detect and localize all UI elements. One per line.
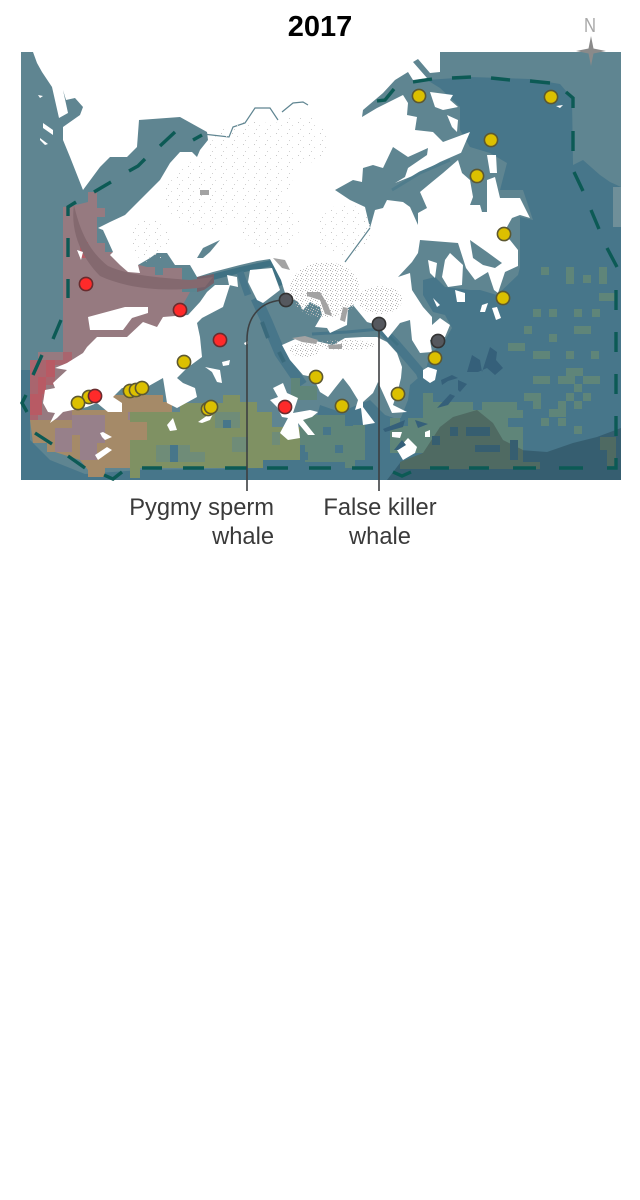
yellow sighting dots [71, 89, 558, 416]
seabed channel on the west [73, 205, 213, 289]
Tolo Harbour [335, 147, 472, 228]
Tolo inner channel [392, 160, 450, 190]
Kowloon and Island urban speckle [290, 262, 402, 357]
mainland [33, 52, 530, 353]
label: False killer whale: whale [348, 524, 411, 550]
grid gaps [432, 427, 518, 460]
light column at east edge [613, 187, 621, 227]
teal cells at pink edge [182, 268, 190, 292]
leader line: False killer whale [378, 324, 380, 491]
density grid: red cells [30, 352, 72, 420]
outlying islands [38, 92, 563, 460]
grey sighting dots [279, 293, 445, 348]
grey built-up patches [200, 190, 348, 349]
grid gaps west [170, 418, 408, 462]
sea base [21, 52, 621, 480]
dark rose water by Ma Wan [197, 274, 214, 292]
density grid: olive zone [130, 395, 300, 478]
title: 2017 [288, 11, 352, 43]
Sai Kung inlet [470, 240, 502, 268]
northern-territories urban speckle [130, 115, 375, 262]
map of Hong Kong waters [21, 52, 621, 480]
shipping channels [205, 263, 428, 392]
leader line: Pygmy sperm whale [247, 300, 286, 491]
density grid: orange zone [30, 395, 172, 477]
river [203, 102, 370, 262]
density grid: pink core [38, 192, 190, 425]
airport island [88, 307, 148, 330]
label: False killer whale: False killer [323, 495, 437, 521]
red sighting dots [79, 277, 292, 414]
label: Pygmy sperm whale: Pygmy sperm [129, 495, 274, 521]
Lamma Island [270, 383, 318, 440]
sea patches in the Clear Water Bay [383, 347, 503, 450]
Hong Kong Island [282, 337, 407, 425]
density grid: east cells [291, 267, 616, 469]
Lantau Island [43, 285, 230, 423]
label: Pygmy sperm whale: whale [211, 524, 274, 550]
management boundary dashed line [22, 77, 617, 479]
dark seabed SE [387, 428, 621, 480]
overlap of seabed and grid [400, 410, 616, 469]
north compass [576, 15, 606, 66]
north compass: N [584, 15, 596, 37]
Mai Po inlet [197, 240, 220, 258]
Tsing Yi [248, 268, 280, 303]
deeper sea zone [21, 77, 621, 480]
